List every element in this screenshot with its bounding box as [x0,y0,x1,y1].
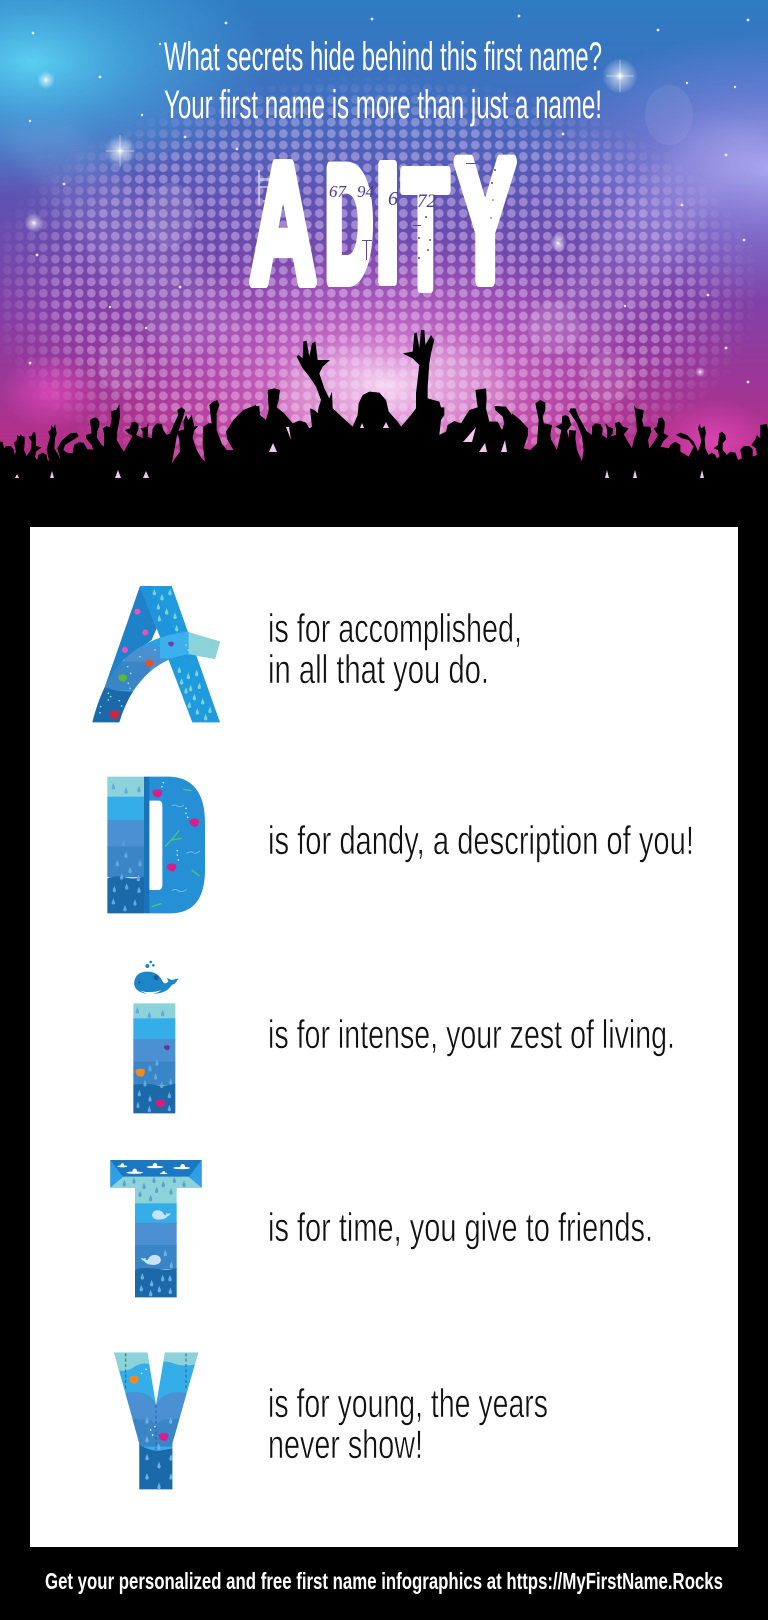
whale [134,961,179,994]
text: A [268,607,522,692]
distressed numerals on the title [258,163,496,260]
distressed numerals on the title: 6 [388,188,398,210]
text: Y [268,1382,548,1467]
text: A: is for accomplished, [268,607,522,651]
name title: ADITY: D [325,135,373,315]
white content panel [30,527,738,1547]
distressed numerals on the title: 67 [329,182,348,201]
text: Y: is for young, the years [268,1382,548,1426]
distressed numerals on the title: 72 [417,191,436,212]
letter D icon [107,777,205,913]
header background: stage lights [0,0,768,464]
name title: ADITY: I [374,128,401,319]
name title: ADITY: Y [456,125,515,318]
crowd silhouette [0,330,768,530]
text: A: in all that you do. [268,648,489,692]
letter A icon [90,586,223,727]
name title: ADITY: A [250,128,316,318]
letter Y icon [114,1352,198,1490]
sparkles and stars [24,15,749,383]
letter I icon with whale [133,961,179,1113]
letter T icon [110,1160,202,1297]
header heading [164,35,602,127]
distressed numerals on the title: 94 [357,182,374,201]
name title: ADITY: T [402,135,449,325]
text: Y: never show! [268,1423,423,1467]
name title: ADITY [250,125,515,325]
